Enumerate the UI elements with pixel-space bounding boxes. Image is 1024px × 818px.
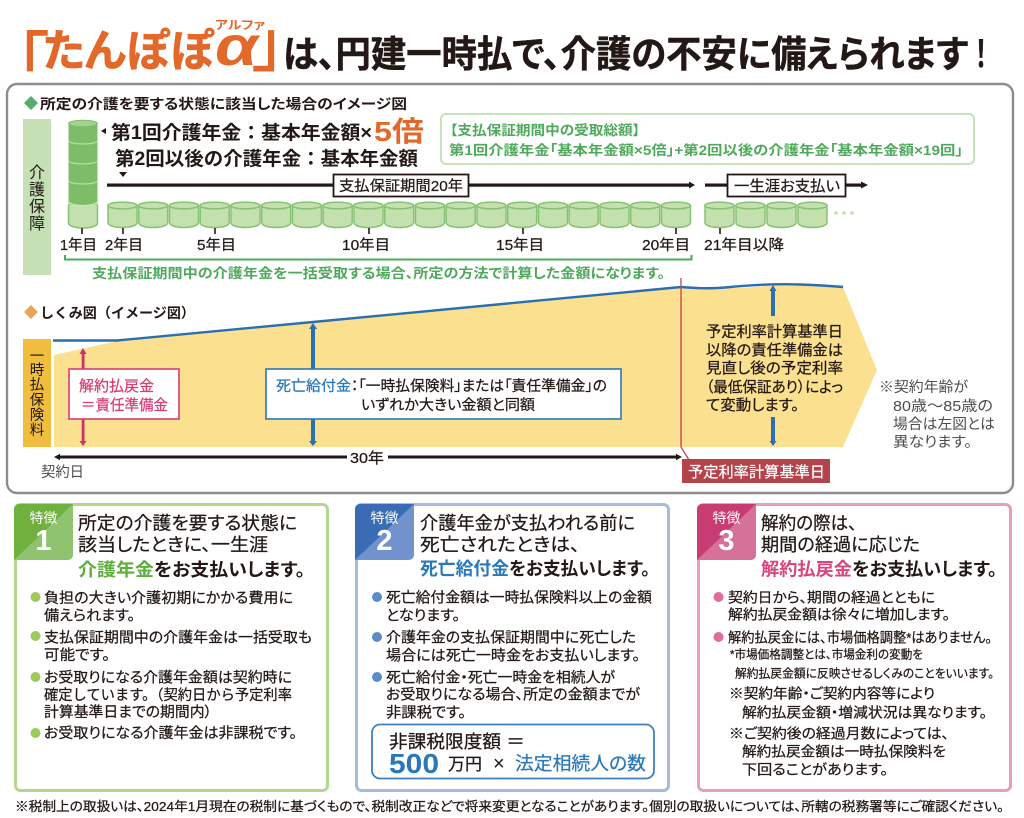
feature 3 notes: *市場価格調整とは、市場金利の変動を <box>730 646 923 662</box>
feature 3 badge: 特徴 <box>712 510 740 526</box>
contract date label: 契約日 <box>41 464 84 481</box>
feature 2 headline: 介護年金が支払われる前に <box>420 514 635 534</box>
title: ！ <box>975 34 987 75</box>
feature 1 bullets: 計算基準日までの期間内） <box>44 704 212 721</box>
feature 3 bullets: 契約日から、期間の経過とともに <box>728 590 935 606</box>
care coverage side label: 保 <box>29 198 45 216</box>
feature 3 headline: をお支払いします。 <box>852 560 997 580</box>
arrow: guarantee period 20 years <box>107 174 695 196</box>
year axis labels: 21年目以降 <box>704 237 785 254</box>
feature 3 bullets: 解約払戻金額は徐々に増加します。 <box>728 606 950 622</box>
callout: surrender value: 解約払戻金 <box>79 378 154 395</box>
tax-free limit formula: 万円 <box>448 755 482 774</box>
feature 3 headline: 解約の際は、 <box>761 514 857 534</box>
feature 1 bullets: 備えられます。 <box>44 608 135 624</box>
feature 1 bullets <box>30 590 312 742</box>
feature 2 bullets: 死亡給付金額は一時払保険料以上の金額 <box>386 590 653 606</box>
note: contract age: 80歳〜85歳の <box>893 398 993 415</box>
panel: overview diagrams <box>7 84 1013 493</box>
first annuity text: 第1回介護年金：基本年金額× <box>111 121 372 144</box>
title: アルファ <box>215 18 265 32</box>
callout: surrender value <box>69 369 179 419</box>
feature 3 badge: 3 <box>718 525 735 557</box>
care coverage side label <box>23 119 51 275</box>
footnote: ※税制上の取扱いは、2024年1月現在の税制に基づくもので、税制改正などで将来変更となることがあります。個別の取扱いについては、所轄の税務署等にご確認ください。 <box>15 799 1004 814</box>
reserve area chart <box>54 284 877 447</box>
callout: death benefit: 死亡給付金 <box>276 378 352 395</box>
arrow: variable reserve <box>770 285 776 446</box>
lump sum premium side label: 険 <box>30 407 45 424</box>
year axis labels: 5年目 <box>197 237 236 254</box>
lump sum premium side label: 時 <box>30 362 44 379</box>
feature 2 bullets: となります。 <box>386 608 460 624</box>
lump sum premium side label: 払 <box>30 376 45 394</box>
panel: feature 3 <box>697 504 1010 790</box>
tax-free limit formula: 法定相続人の数 <box>515 753 646 774</box>
year axis labels <box>60 228 785 254</box>
feature 1 bullets: お受取りになる介護年金は非課税です。 <box>44 725 297 742</box>
feature 1 badge: 1 <box>35 525 52 557</box>
note: contract age: 場合は左図とは <box>893 416 995 433</box>
feature 2 bullets: 介護年金の支払保証期間中に死亡した <box>386 630 636 646</box>
title: α <box>215 14 261 77</box>
callout: death benefit <box>266 369 621 419</box>
lump sum premium side label: 一 <box>30 349 44 365</box>
cylinders: years 2 to 20 <box>108 202 691 228</box>
feature 1 headline: 該当したときに、一生涯 <box>78 535 268 555</box>
feature 1 bullets: 負担の大きい介護初期にかかる費用に <box>44 590 293 607</box>
panel: feature 2 <box>355 504 668 790</box>
arrow: 30 years <box>54 450 682 467</box>
feature 1 headline: 介護年金 <box>78 559 154 580</box>
feature 2 bullets <box>372 590 653 722</box>
second annuity text: 第2回以後の介護年金：基本年金額 <box>115 147 418 170</box>
tax-free limit formula <box>372 724 654 779</box>
tax-free limit formula: 非課税限度額 ＝ <box>389 732 525 752</box>
note: contract age: 異なります。 <box>893 434 972 451</box>
feature 3 notes: 下回ることがあります。 <box>742 762 888 778</box>
cylinders: year 21 onward <box>705 202 854 228</box>
year axis labels: 10年目 <box>342 237 390 254</box>
total receipt callout: 【支払保証期間中の受取総額】 <box>450 122 640 138</box>
arrow: lifetime payment: 一生涯お支払い <box>734 178 840 195</box>
lump sum note with bracket: 支払保証期間中の介護年金を一括受取する場合、所定の方法で計算した金額になります。 <box>92 265 665 281</box>
feature 1 bullets: 確定しています。（契約日から予定利率 <box>44 687 292 704</box>
feature 2 badge: 2 <box>376 525 393 557</box>
feature 3 notes <box>729 646 994 778</box>
year axis labels: 1年目 <box>60 237 97 254</box>
feature 2 bullets: 死亡給付金・死亡一時金を相続人が <box>386 670 616 686</box>
tax-free limit formula: × <box>493 753 505 775</box>
lump sum premium side label: 保 <box>30 392 45 409</box>
base date marker: 予定利率計算基準日 <box>688 463 825 481</box>
title: たんぽぽ <box>43 27 215 76</box>
feature 3 notes: 解約払戻金額・増減状況は異なります。 <box>742 704 987 720</box>
feature 1 headline: をお支払いします。 <box>154 560 305 580</box>
year 1 stacked cylinders <box>68 120 98 228</box>
total receipt callout <box>441 114 974 164</box>
callout: death benefit: ：「一時払保険料」または「責任準備金」の <box>351 378 607 395</box>
text: reserve after base date: （最低保証あり）によっ <box>706 379 843 396</box>
feature 3 bullets <box>714 590 992 646</box>
text: reserve after base date <box>706 322 843 414</box>
feature 3 notes: 解約払戻金額に反映させるしくみのことをいいます。 <box>735 666 994 680</box>
arrow: guarantee period 20 years: 支払保証期間20年 <box>339 178 463 195</box>
feature 3 notes: 解約払戻金額は一時払保険料を <box>742 744 946 760</box>
arrow: lifetime payment <box>705 174 868 196</box>
feature 3 headline: 期間の経過に応じた <box>761 535 920 555</box>
feature 2 badge: 特徴 <box>370 510 398 526</box>
heading: care image: 所定の介護を要する状態に該当した場合のイメージ図 <box>40 96 407 112</box>
note: contract age <box>879 379 995 451</box>
arrow: 30 years: 30年 <box>350 450 384 467</box>
feature 2 headline: 死亡されたときは、 <box>420 535 580 555</box>
total receipt callout: 第1回介護年金「基本年金額×5倍」+第2回以後の介護年金「基本年金額×19回」 <box>449 142 963 158</box>
death benefit line <box>53 284 843 340</box>
feature 2 headline: 死亡給付金 <box>420 559 509 579</box>
panel: feature 1 <box>14 504 328 790</box>
year axis labels: 15年目 <box>496 237 544 254</box>
feature 3 headline: 解約払戻金 <box>761 560 852 580</box>
feature 3 notes: ※契約年齢・ご契約内容等により <box>729 686 935 702</box>
care coverage side label: 介 <box>29 165 45 182</box>
feature 2 bullets: 非課税です。 <box>386 704 466 722</box>
arrow: death benefit <box>309 323 317 446</box>
year axis labels: 20年目 <box>642 237 690 254</box>
base date marker <box>681 278 830 483</box>
heading: mechanism image: しくみ図（イメージ図） <box>40 305 195 321</box>
first annuity text: 5倍 <box>374 116 424 147</box>
title: は、円建一時払で、介護の不安に備えられます <box>283 34 968 75</box>
lump sum premium side label: 料 <box>30 422 44 439</box>
care coverage side label: 障 <box>29 215 45 233</box>
lump sum note with bracket <box>65 255 692 281</box>
year axis labels: 2年目 <box>105 237 143 254</box>
title: 」 <box>252 10 313 78</box>
feature 2 bullets: お受取りになる場合、所定の金額までが <box>386 686 641 704</box>
feature 3 notes: ※ご契約後の経過月数によっては、 <box>729 726 949 742</box>
title <box>0 10 987 96</box>
tax-free limit formula: 500 <box>389 748 439 779</box>
feature 1 bullets: 支払保証期間中の介護年金は一括受取も <box>44 630 312 646</box>
feature 1 bullets: 可能です。 <box>44 647 110 664</box>
callout: surrender value: ＝責任準備金 <box>81 397 168 414</box>
feature 2 headline: をお支払いします。 <box>509 559 650 579</box>
text: reserve after base date: 以降の責任準備金は <box>706 342 843 359</box>
feature 3 headline <box>761 514 997 580</box>
text: reserve after base date: 予定利率計算基準日 <box>706 322 843 340</box>
note: contract age: ※契約年齢が <box>879 379 969 396</box>
text: reserve after base date: 見直し後の予定利率 <box>706 360 843 377</box>
care coverage side label: 護 <box>29 181 45 199</box>
arrow: surrender value <box>80 348 86 446</box>
callout: death benefit: いずれか大きい金額と同額 <box>361 397 536 414</box>
feature 1 bullets: お受取りになる介護年金額は契約時に <box>44 670 292 686</box>
text: reserve after base date: て変動します。 <box>706 397 799 414</box>
feature 1 headline <box>78 514 305 580</box>
lump sum premium side label <box>23 339 51 447</box>
feature 3 bullets: 解約払戻金には、市場価格調整*はありません。 <box>728 630 992 646</box>
feature 1 headline: 所定の介護を要する状態に <box>78 514 297 534</box>
feature 3 badge <box>697 504 756 560</box>
feature 1 badge <box>14 504 73 560</box>
first annuity text <box>101 116 424 147</box>
second annuity text <box>115 147 418 177</box>
feature 2 bullets: 場合には死亡一時金をお支払いします。 <box>386 648 640 664</box>
feature 2 headline <box>420 514 650 579</box>
feature 1 badge: 特徴 <box>30 510 58 526</box>
feature 2 badge <box>355 504 414 560</box>
